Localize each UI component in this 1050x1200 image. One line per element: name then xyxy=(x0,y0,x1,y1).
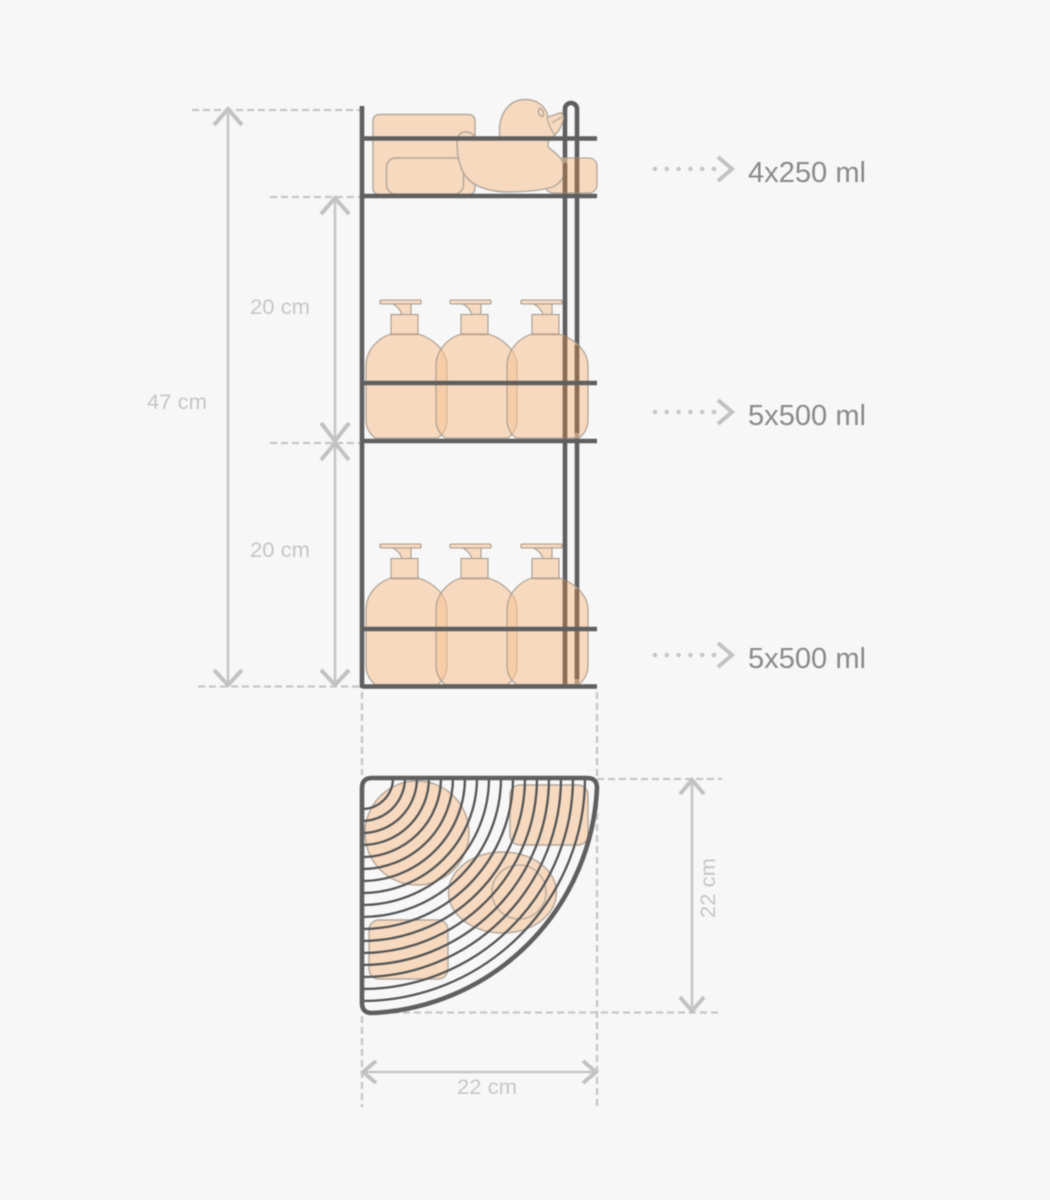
dimension: lower spacing 20 cm xyxy=(250,443,349,685)
capacity callout: middle shelf: 5x500 ml xyxy=(748,400,866,432)
capacity callout: bottom shelf: 5x500 ml xyxy=(748,643,866,675)
capacity callout: middle shelf xyxy=(655,400,866,432)
bottle 4 xyxy=(366,544,447,684)
dimension: total height 47 cm xyxy=(147,109,242,685)
bottle 3 xyxy=(507,300,588,438)
soap bar seen from above xyxy=(510,785,588,845)
sponge seen from above xyxy=(369,920,448,979)
basket outline xyxy=(362,778,597,1013)
dimension: total height 47 cm: 47 cm xyxy=(147,391,207,414)
towel xyxy=(373,114,475,194)
bottle 5 xyxy=(436,544,517,684)
bottle 2 xyxy=(436,300,517,438)
top view of corner basket xyxy=(359,775,600,1016)
capacity callout: top shelf: 4x250 ml xyxy=(748,157,866,189)
dimension: width 22 cm xyxy=(363,1061,596,1099)
right tube of the frame xyxy=(565,103,577,686)
basket wires xyxy=(364,780,587,1003)
capacity callout: bottom shelf xyxy=(655,643,866,675)
soap bar behind tube xyxy=(545,158,597,193)
dimension: width 22 cm: 22 cm xyxy=(457,1076,517,1099)
dimension: depth 22 cm: 22 cm xyxy=(697,858,720,918)
soap bar xyxy=(386,158,464,194)
bottle 1 xyxy=(366,300,447,438)
rubber duck xyxy=(457,100,565,192)
middle shelf bottles xyxy=(366,300,588,438)
dimension: lower spacing 20 cm: 20 cm xyxy=(250,539,310,562)
bottom shelf bottles xyxy=(366,544,588,684)
capacity callout: top shelf xyxy=(655,157,866,189)
top shelf items xyxy=(373,100,597,194)
shelf frame xyxy=(362,106,597,688)
dimension: depth 22 cm xyxy=(680,780,720,1011)
dimension: upper spacing 20 cm xyxy=(250,198,349,441)
duck seen from above xyxy=(448,852,556,933)
round bottle seen from above xyxy=(365,781,469,885)
shelf dimension diagram xyxy=(147,98,865,1108)
bottle 6 xyxy=(507,544,588,684)
dimension: upper spacing 20 cm: 20 cm xyxy=(250,296,310,319)
